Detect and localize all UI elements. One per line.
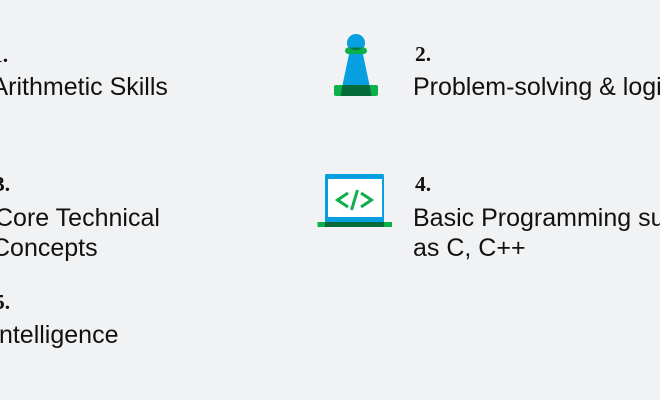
text: Core Technical Concepts [0, 204, 160, 262]
text: Basic Programming such as C, C++: as C, C++ [413, 234, 526, 262]
icon: chess pawn [334, 34, 378, 96]
number 2: 2. [415, 42, 431, 66]
text: Basic Programming such as C, C++ [413, 204, 660, 262]
number 4: 4. [415, 172, 431, 196]
icon: laptop with code [318, 174, 392, 227]
